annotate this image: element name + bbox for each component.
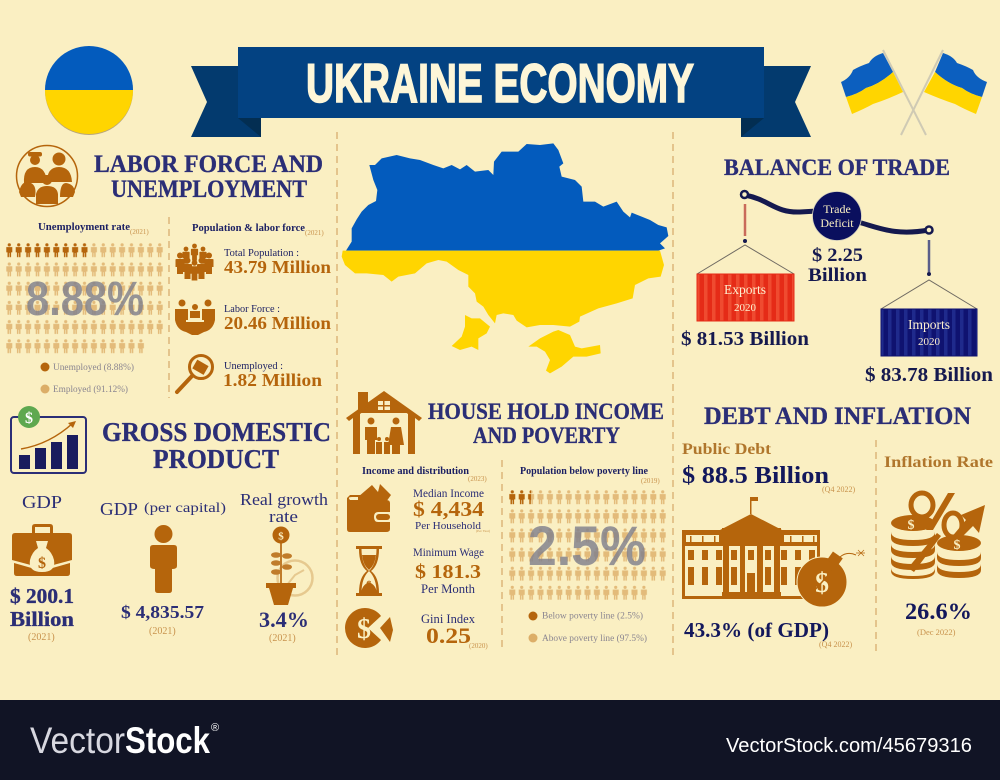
icon: crossed flags <box>841 50 987 135</box>
icon: briefcase with money bag <box>12 524 72 576</box>
title text: UKRAINE ECONOMY <box>306 52 694 114</box>
heading: LABOR FORCE AND <box>94 151 323 178</box>
trade deficit badge: Trade <box>823 202 851 216</box>
heading: UNEMPLOYMENT <box>111 176 307 203</box>
icon: hourglass <box>356 546 382 596</box>
icon: growth chart <box>11 406 86 473</box>
legend: Unemployed (8.88%) <box>53 362 134 372</box>
icon: people on gear <box>175 300 215 335</box>
gini index <box>421 611 488 650</box>
unemployed <box>223 361 322 390</box>
minimum wage <box>413 545 484 596</box>
footer logo: ® <box>211 722 219 734</box>
icon: government building <box>682 497 820 599</box>
subheading: income: Income and distribution <box>362 465 469 477</box>
real growth value <box>259 607 309 644</box>
heading: PRODUCT <box>153 444 279 474</box>
footer logo: Vector <box>30 720 125 761</box>
public debt value: (Q4 2022) <box>822 485 855 494</box>
minimum wage: Per Month <box>421 581 475 596</box>
subheading: unemployment rate: Unemployment rate <box>38 221 130 233</box>
gini index: 0.25 <box>426 623 471 648</box>
GDP value <box>10 584 74 631</box>
pictogram: unemployment people grid <box>5 243 164 358</box>
title banner <box>191 47 811 137</box>
icon: debt bomb <box>797 550 865 607</box>
gini index: Gini Index <box>421 611 475 626</box>
icon: money plant: $ <box>278 530 284 542</box>
icon: balance beam <box>697 191 977 309</box>
subheading: poverty: (2019) <box>641 477 660 485</box>
GDP per capita value: (2021) <box>149 626 176 637</box>
GDP per capita label: (per capital) <box>144 501 226 516</box>
legend: Employed (91.12%) <box>53 384 128 394</box>
GDP value: $ 200.1 <box>10 584 74 608</box>
exports container: 2020 <box>734 302 756 314</box>
public debt value: $ 88.5 Billion <box>682 463 829 489</box>
legend <box>40 362 134 394</box>
trade deficit badge: Deficit <box>820 216 854 230</box>
legend: Below poverty line (2.5%) <box>542 610 643 620</box>
GDP per capita value: $ 4,835.57 <box>121 602 204 622</box>
real growth value: (2021) <box>269 633 296 644</box>
icon: workers in circle <box>16 146 78 206</box>
icon: growth chart: $ <box>25 410 33 427</box>
labor force <box>224 304 331 333</box>
pictogram: poverty people grid <box>508 490 667 604</box>
heading <box>94 151 323 203</box>
labor force: 20.46 Million <box>224 313 331 333</box>
inflation value <box>905 599 972 637</box>
heading: HOUSE HOLD INCOME <box>428 399 664 425</box>
labor force: Labor Force : <box>224 304 280 315</box>
inflation value: 26.6% <box>905 599 972 624</box>
map of Ukraine in flag colours <box>342 143 668 373</box>
imports container <box>881 309 977 356</box>
unemployed: Unemployed : <box>224 361 283 372</box>
gini index: (2020) <box>469 642 488 650</box>
icon: briefcase with money bag: $ <box>38 555 46 572</box>
imports container: 2020 <box>918 336 940 348</box>
public debt value <box>682 463 855 494</box>
icon: wallet <box>347 484 391 532</box>
exports container: Exports <box>724 282 766 297</box>
heading: AND POVERTY <box>473 423 620 449</box>
total population: 43.79 Million <box>224 257 331 277</box>
GDP per capita label <box>100 499 226 519</box>
imports container: Imports <box>908 317 950 332</box>
footer logo: Stock <box>125 720 210 761</box>
GDP per capita label: GDP <box>100 499 138 519</box>
panel: labor force and unemployment <box>5 146 331 394</box>
trade deficit badge <box>812 192 862 240</box>
icon: coins and percent: $ <box>908 518 914 533</box>
icon: round Ukraine flag <box>45 46 133 135</box>
median income: Per Household <box>415 520 482 532</box>
icon: Gini pie with dollar <box>345 608 393 648</box>
GDP value: Billion <box>10 607 74 631</box>
subheading: poverty <box>520 465 660 485</box>
subheading: population: (2021) <box>305 229 324 237</box>
icon: money plant <box>266 526 312 605</box>
big number: 2.5% <box>528 514 646 577</box>
icon: hourglass: $ <box>366 579 372 591</box>
inflation value: (Dec 2022) <box>917 627 956 637</box>
subheading: unemployment rate <box>38 221 149 236</box>
trade deficit value: $ 2.25 <box>812 245 863 266</box>
icon: person <box>150 525 177 593</box>
real growth label: rate <box>269 507 298 526</box>
GDP per capita value <box>121 602 204 637</box>
debt share of GDP: 43.3% (of GDP) <box>684 618 829 642</box>
total population: Total Population : <box>224 248 299 259</box>
icon: crowd <box>176 244 214 280</box>
icon: coins and percent <box>891 493 985 579</box>
heading <box>102 417 331 474</box>
debt share of GDP <box>684 618 852 649</box>
panel: household income and poverty <box>345 391 667 650</box>
median income: (Per Year) <box>476 529 491 533</box>
heading: GROSS DOMESTIC <box>102 417 331 447</box>
heading: BALANCE OF TRADE <box>724 155 950 181</box>
exports value: $ 81.53 Billion <box>681 329 809 350</box>
trade deficit value: Billion <box>808 265 867 286</box>
icon: magnifier with briefcase <box>177 356 212 392</box>
public debt label: Public Debt <box>682 441 772 458</box>
minimum wage: Minimum Wage <box>413 545 484 559</box>
icon: coins and percent: $ <box>954 538 960 553</box>
icon: house with family <box>346 391 422 454</box>
minimum wage: $ 181.3 <box>415 561 481 583</box>
heading: DEBT AND INFLATION <box>704 403 971 430</box>
panel: debt and inflation <box>682 403 993 649</box>
legend <box>528 610 647 643</box>
unemployed: 1.82 Million <box>223 370 322 390</box>
debt share of GDP: (Q4 2022) <box>819 640 852 649</box>
GDP label: GDP <box>22 492 62 512</box>
subheading: income: (2023) <box>468 475 487 483</box>
legend: Above poverty line (97.5%) <box>542 633 647 643</box>
imports value: $ 83.78 Billion <box>865 365 993 386</box>
footer logo <box>30 720 219 761</box>
subheading: income <box>362 465 487 483</box>
median income: $ 4,434 <box>413 497 485 521</box>
real growth label <box>240 490 329 526</box>
total population <box>224 248 331 277</box>
footer id: VectorStock.com/45679316 <box>726 735 972 757</box>
subheading: poverty: Population below poverty line <box>520 465 648 477</box>
footer bar <box>0 700 1000 780</box>
heading <box>428 399 664 449</box>
median income <box>413 486 491 533</box>
median income: Median Income <box>413 486 484 500</box>
inflation label: Inflation Rate <box>884 454 993 471</box>
panel: gross domestic product <box>10 406 331 644</box>
subheading: unemployment rate: (2021) <box>130 228 149 236</box>
real growth label: Real growth <box>240 490 329 509</box>
trade deficit value <box>808 245 867 286</box>
big number: 8.88% <box>26 273 144 326</box>
icon: Gini pie with dollar: $ <box>357 614 371 645</box>
icon: debt bomb: $ <box>815 568 829 599</box>
real growth value: 3.4% <box>259 607 309 632</box>
year: (2021) <box>28 632 55 643</box>
subheading: population: Population & labor force <box>192 222 305 234</box>
panel: balance of trade <box>681 155 993 386</box>
exports container <box>697 274 794 321</box>
